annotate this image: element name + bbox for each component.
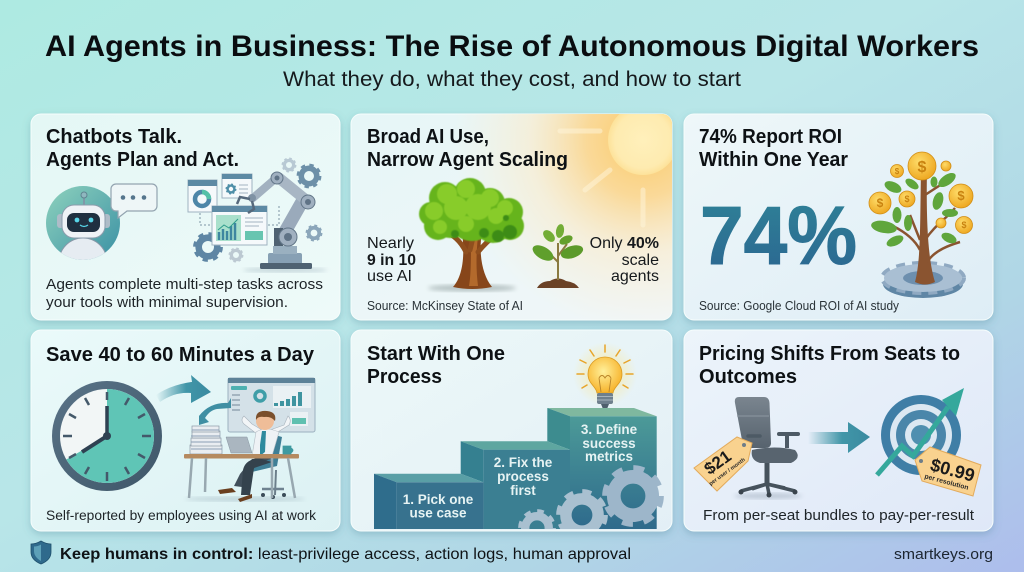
price tag: $0.99 xyxy=(915,447,981,496)
subtitle: What they do, what they cost, and how to start xyxy=(283,67,741,91)
source: McKinsey: Source: McKinsey State of AI xyxy=(367,299,523,313)
icon: money tree on gear: $ xyxy=(895,167,900,176)
icon: dashboard xyxy=(228,378,315,432)
price tag: $21: $21 xyxy=(701,447,735,479)
arrow: seats to outcomes xyxy=(808,422,870,453)
text: per-seat to pay-per-result: From per-seat bundles to pay-per-result xyxy=(703,507,975,524)
price tag: $0.99: $0.99 xyxy=(928,455,977,486)
icon: robot xyxy=(46,186,120,260)
footer text: Keep humans in control: least-privilege access, action logs, human approval xyxy=(60,546,631,563)
arrow: time saved xyxy=(156,375,211,403)
icon: target with trend arrow xyxy=(877,388,964,475)
step 2 xyxy=(461,441,570,530)
title: AI Agents in Business: The Rise of Autonomous Digital Workers xyxy=(45,30,979,63)
icon: relaxed worker at desk xyxy=(184,411,305,502)
icon: office chair xyxy=(734,397,802,499)
text: only 40%: scale xyxy=(622,252,659,269)
footer site: smartkeys.org xyxy=(894,546,993,563)
heading: broad AI use: Narrow Agent Scaling xyxy=(367,149,568,171)
icon: lightbulb xyxy=(573,342,637,409)
step label 3: 3. Define xyxy=(581,422,638,437)
text: nearly 9 in 10: 9 in 10 xyxy=(367,252,416,269)
text: nearly 9 in 10: use AI xyxy=(367,268,412,285)
step label 2: 2. Fix the xyxy=(494,455,553,470)
text: agents description: your tools with minimal supervision. xyxy=(46,294,288,311)
icon: money tree on gear: $ xyxy=(877,196,884,210)
panel: ROI xyxy=(684,114,993,320)
step label 1: 1. Pick one xyxy=(403,492,474,507)
heading: chatbots: Agents Plan and Act. xyxy=(46,149,239,171)
stairs xyxy=(374,408,660,544)
source: Google Cloud: Source: Google Cloud ROI of AI study xyxy=(699,299,900,313)
panel: chatbots vs agents xyxy=(31,114,340,320)
heading: pricing: Pricing Shifts From Seats to xyxy=(699,343,960,365)
icon: money tree on gear: $ xyxy=(957,188,965,203)
step 3 xyxy=(547,408,657,529)
step label 1: use case xyxy=(409,506,467,520)
icon: money tree on gear xyxy=(869,152,973,298)
panel: start with one process xyxy=(351,330,672,544)
heading: save time: Save 40 to 60 Minutes a Day xyxy=(46,344,315,366)
big number 74%: 74% xyxy=(700,189,857,282)
heading: ROI: Within One Year xyxy=(699,149,848,171)
step 1 xyxy=(374,474,483,530)
icon: shield xyxy=(31,541,51,564)
icon: clock xyxy=(52,381,162,491)
panel: broad AI use xyxy=(351,105,678,320)
step label 3: metrics xyxy=(585,449,633,464)
heading: start with one process: Process xyxy=(367,366,442,388)
icon: large tree xyxy=(419,178,524,292)
panel: save time xyxy=(31,330,340,531)
step label 3: success xyxy=(582,436,636,451)
step label 2: process xyxy=(497,469,549,484)
price tag: $0.99: per resolution xyxy=(924,473,969,492)
heading: chatbots: Chatbots Talk. xyxy=(46,126,182,148)
step label 2: first xyxy=(510,483,536,498)
text: only 40%: Only 40% xyxy=(590,235,659,252)
heading: ROI: 74% Report ROI xyxy=(699,126,842,148)
arrow: swap xyxy=(199,398,231,425)
heading: start with one process: Start With One xyxy=(367,343,505,365)
heading: pricing: Outcomes xyxy=(699,366,797,388)
icon: money tree on gear: $ xyxy=(961,220,967,230)
icon: speech bubble xyxy=(111,184,157,218)
heading: broad AI use: Broad AI Use, xyxy=(367,126,489,148)
icon: sapling xyxy=(530,223,585,288)
icon: money tree on gear: $ xyxy=(918,159,927,176)
text: self-reported: Self-reported by employees using AI at work xyxy=(46,508,316,523)
text: agents description: Agents complete multi-step tasks across xyxy=(46,276,323,293)
price tag: $21: per user / month xyxy=(708,457,747,487)
text: only 40%: agents xyxy=(611,268,659,285)
panel: pricing xyxy=(684,330,993,531)
gears xyxy=(606,469,660,523)
price tag: $21 xyxy=(694,437,752,491)
icon: software windows and robot arm xyxy=(188,159,327,272)
text: nearly 9 in 10: Nearly xyxy=(367,235,414,252)
icon: money tree on gear: $ xyxy=(904,194,910,204)
icon: sun xyxy=(479,114,672,304)
